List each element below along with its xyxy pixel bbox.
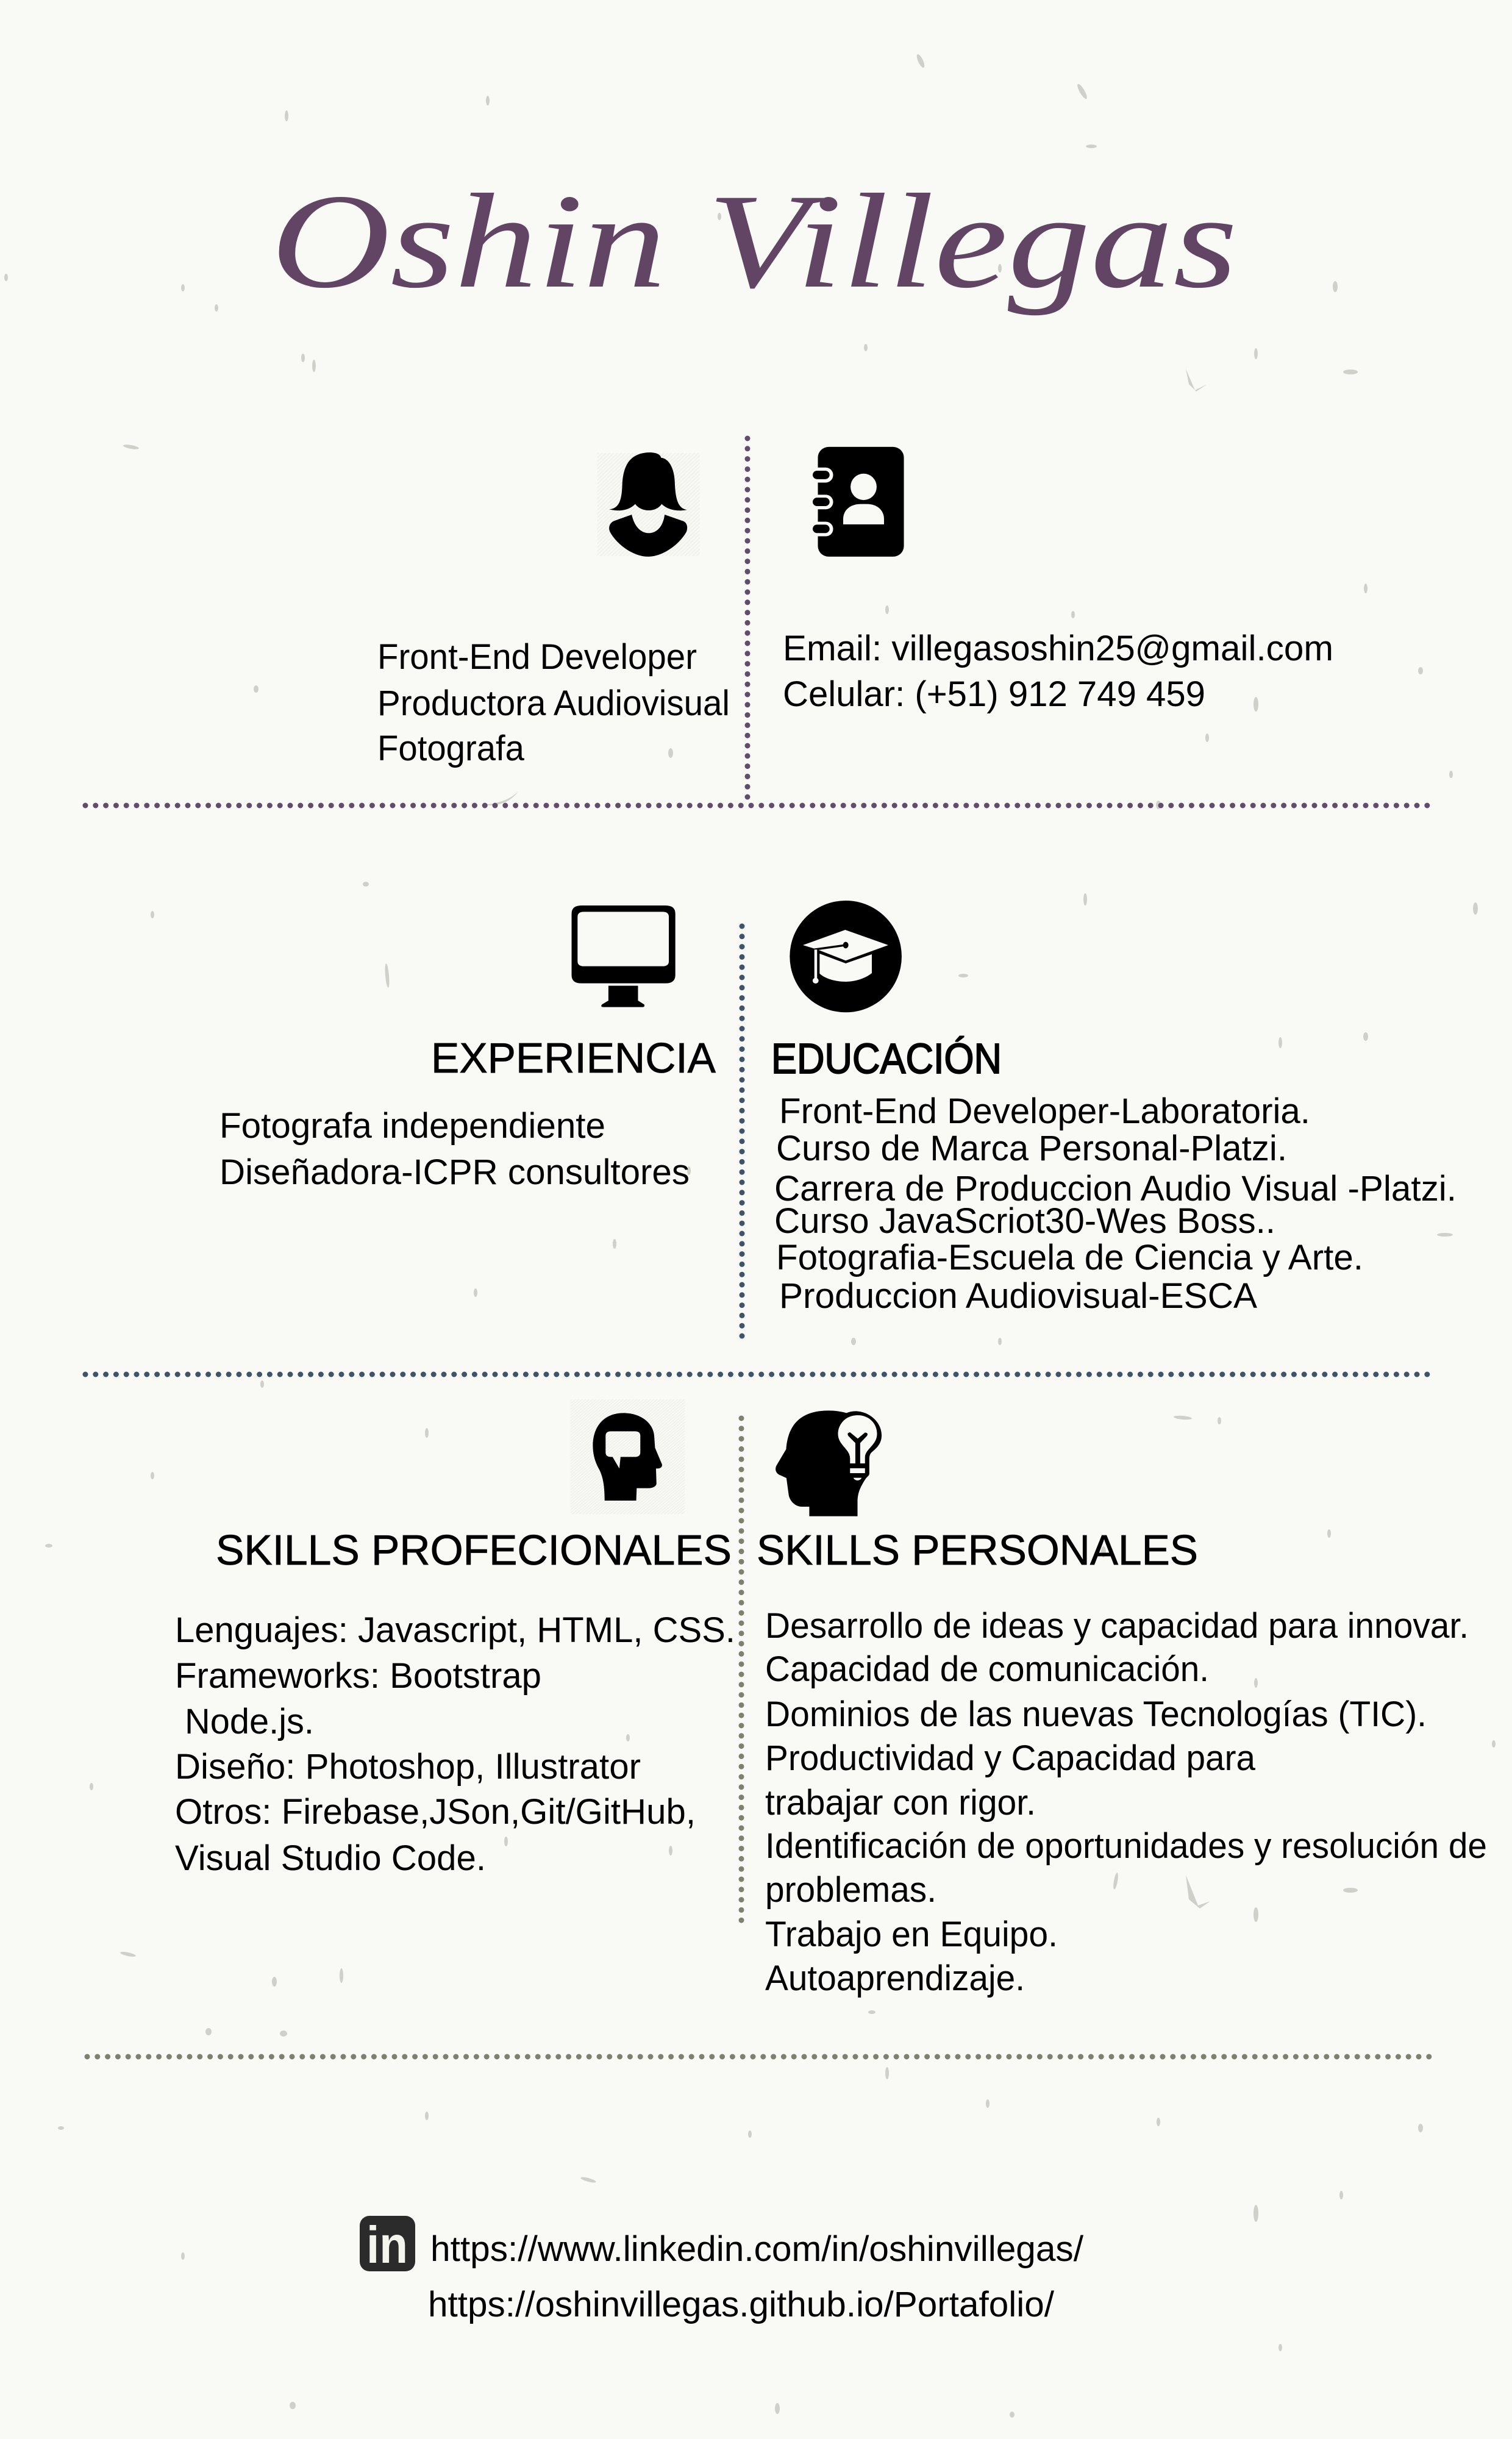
heading: professional skills: SKILLS PROFECIONALES [216,1526,732,1574]
panel: experience [219,905,716,1192]
text: contact details [783,629,1333,714]
text: personal skills list: Identificación de oportunidades y resolución de [765,1826,1487,1866]
panel: education [771,901,1457,1316]
title: Oshin Villegas [271,166,1238,316]
text: professional skills list: Frameworks: Bootstrap [175,1656,541,1696]
panel: professional skills [175,1399,735,1878]
text: personal skills list: Autoaprendizaje. [765,1959,1025,1998]
icon: head with speech bubble [571,1399,685,1514]
text: education list: Carrera de Produccion Audio Visual -Platzi. [774,1169,1457,1209]
text: professional skills list: Visual Studio Code. [175,1838,486,1878]
text: personal skills list [765,1606,1487,1998]
icon: monitor [572,905,676,1007]
text: personal skills list: Capacidad de comunicación. [765,1649,1209,1689]
text: linkedin url: https://www.linkedin.com/in/oshinvillegas/ [430,2229,1084,2269]
text: professional skills list: Node.js. [185,1702,314,1741]
text: education list: Fotografia-Escuela de Ciencia y Arte. [776,1238,1363,1277]
panel: links [360,2216,1084,2324]
text: experience list: Diseñadora-ICPR consultores [219,1152,690,1192]
text: education list: Front-End Developer-Laboratoria. [779,1091,1310,1131]
text: education list [774,1091,1457,1316]
text: personal skills list: Productividad y Capacidad para [765,1738,1256,1778]
text: experience list [219,1106,690,1192]
icon: linkedin: in [366,2216,408,2274]
text: experience list: Fotografa independiente [219,1106,605,1146]
text: professional skills list: Lenguajes: Javascript, HTML, CSS. [175,1610,735,1650]
icon: graduation cap [790,901,902,1012]
heading: personal skills: SKILLS PERSONALES [757,1526,1198,1574]
text: contact details: Email: villegasoshin25@gmail.com [783,629,1333,668]
icon: woman silhouette [597,452,700,557]
text: personal skills list: problemas. [765,1870,936,1910]
text: professional skills list [175,1610,735,1878]
text: roles: Fotografa [377,729,525,768]
text: personal skills list: Trabajo en Equipo. [765,1915,1058,1954]
icon: contact book [810,447,904,557]
text: professional skills list: Diseño: Photoshop, Illustrator [175,1747,641,1787]
text: personal skills list: Desarrollo de ideas y capacidad para innovar. [765,1606,1469,1646]
text: roles: Front-End Developer [377,637,697,677]
text: portfolio url: https://oshinvillegas.github.io/Portafolio/ [428,2285,1055,2324]
text: personal skills list: Dominios de las nuevas Tecnologías (TIC). [765,1694,1427,1734]
text: education list: Produccion Audiovisual-ESCA [779,1276,1257,1316]
text: contact details: Celular: (+51) 912 749 459 [783,674,1205,714]
heading: education: EDUCACIÓN [771,1035,1002,1082]
text: education list: Curso de Marca Personal-Platzi. [776,1129,1287,1168]
panel: personal skills [757,1410,1487,1998]
text: roles: Productora Audiovisual [377,684,730,723]
text: professional skills list: Otros: Firebase,JSon,Git/GitHub, [175,1792,696,1832]
heading: experience: EXPERIENCIA [431,1034,716,1082]
text: education list: Curso JavaScriot30-Wes Boss.. [774,1201,1275,1241]
icon: head with light bulb [776,1410,882,1516]
panel: profile and contact [377,447,1333,768]
text: personal skills list: trabajar con rigor. [765,1783,1036,1823]
text: roles [377,637,730,768]
